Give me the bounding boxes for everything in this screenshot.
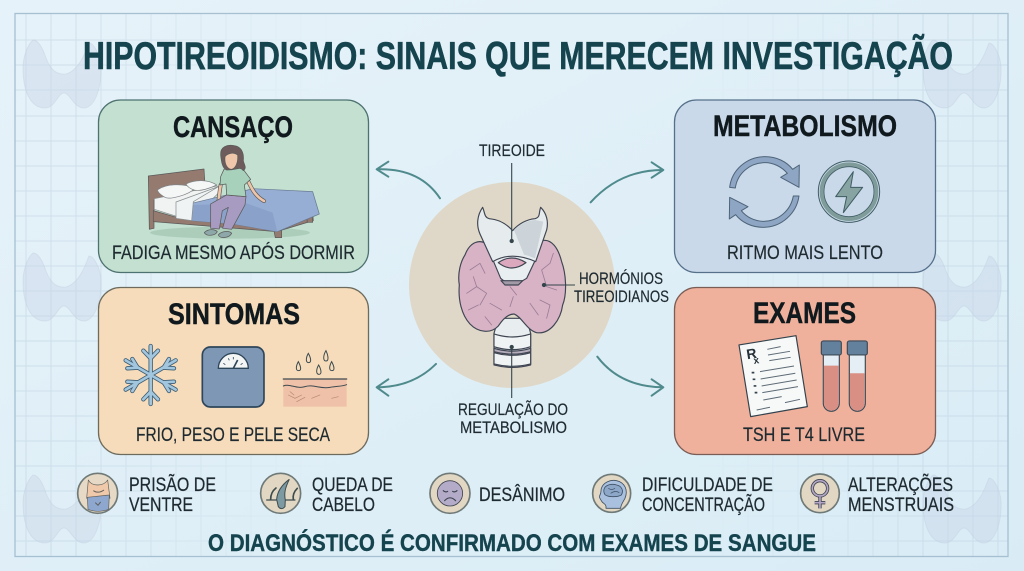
icon: prescription sheet — [739, 336, 807, 417]
label: hormônios tireoidianos: HORMÓNIOS — [579, 269, 663, 288]
heading: exames: EXAMES — [753, 297, 856, 330]
label: tireoide: TIREOIDE — [479, 141, 545, 160]
symptom: desânimo — [430, 473, 565, 513]
label: regulação do metabolismo — [458, 400, 568, 437]
footer statement: O DIAGNÓSTICO É CONFIRMADO COM EXAMES DE SANGUE — [208, 529, 816, 557]
symptom: queda de cabelo — [261, 473, 393, 516]
text — [642, 475, 773, 516]
text: CONCENTRAÇÃO — [642, 494, 765, 516]
label: hormônios tireoidianos: TIREOIDIANOS — [574, 287, 669, 306]
arrow: to exames — [597, 357, 663, 396]
arrow: to cansaço — [377, 162, 440, 198]
text: MENSTRUAIS — [848, 495, 954, 516]
icon: cycle arrows — [729, 157, 799, 227]
label: hormônios tireoidianos — [574, 269, 669, 306]
icon: hair follicle — [261, 473, 301, 513]
panel: metabolismo — [674, 100, 936, 272]
text: QUEDA DE — [312, 475, 393, 496]
icon: prescription sheet: x — [753, 355, 760, 367]
text: DIFICULDADE DE — [642, 475, 773, 496]
text — [129, 474, 216, 516]
text — [312, 475, 393, 516]
icon: energy bolt — [818, 161, 880, 222]
central thyroid diagram — [409, 141, 669, 437]
panel: cansaço — [98, 100, 368, 272]
arrow: to metabolismo — [591, 162, 663, 202]
backdrop circle — [409, 182, 615, 388]
symptom: alterações menstruais — [801, 474, 954, 516]
panel: sintomas — [98, 288, 368, 454]
icon: head with brain — [593, 474, 631, 512]
label: regulação do metabolismo: REGULAÇÃO DO — [458, 400, 568, 419]
text: VENTRE — [129, 495, 193, 516]
caption: fadiga: FADIGA MESMO APÓS DORMIR — [112, 242, 355, 264]
icon: dry skin — [283, 351, 347, 407]
text: PRISÃO DE — [129, 474, 216, 496]
icon: venus symbol — [801, 474, 839, 513]
symptom: dificuldade de concentração — [593, 474, 773, 516]
icon: thyroid gland and trachea — [459, 207, 566, 367]
icon: prescription sheet: R — [745, 345, 758, 362]
icon: sad face — [430, 473, 470, 513]
arrow: to sintomas — [377, 364, 436, 396]
heading: sintomas: SINTOMAS — [168, 298, 300, 331]
label: regulação do metabolismo: METABOLISMO — [460, 418, 567, 437]
icon: woman sitting on a bed — [148, 145, 319, 239]
panel: exames — [674, 288, 936, 454]
heading: metabolismo: METABOLISMO — [713, 110, 897, 143]
icon: abdomen — [78, 473, 118, 513]
icon: bathroom scale — [202, 347, 264, 407]
caption: ritmo: RITMO MAIS LENTO — [727, 243, 883, 264]
caption: frio peso pele: FRIO, PESO E PELE SECA — [136, 425, 330, 446]
text: ALTERAÇÕES — [848, 474, 953, 496]
text: DESÂNIMO — [479, 484, 565, 506]
symptom: prisão de ventre — [78, 473, 216, 516]
leader lines — [510, 163, 575, 398]
heading: cansaço: CANSAÇO — [173, 111, 293, 144]
icon: blood test tubes — [821, 341, 867, 411]
text: CABELO — [312, 495, 375, 516]
caption: tsh t4: TSH E T4 LIVRE — [743, 425, 865, 446]
text — [848, 474, 954, 516]
icon: snowflake — [126, 346, 176, 404]
